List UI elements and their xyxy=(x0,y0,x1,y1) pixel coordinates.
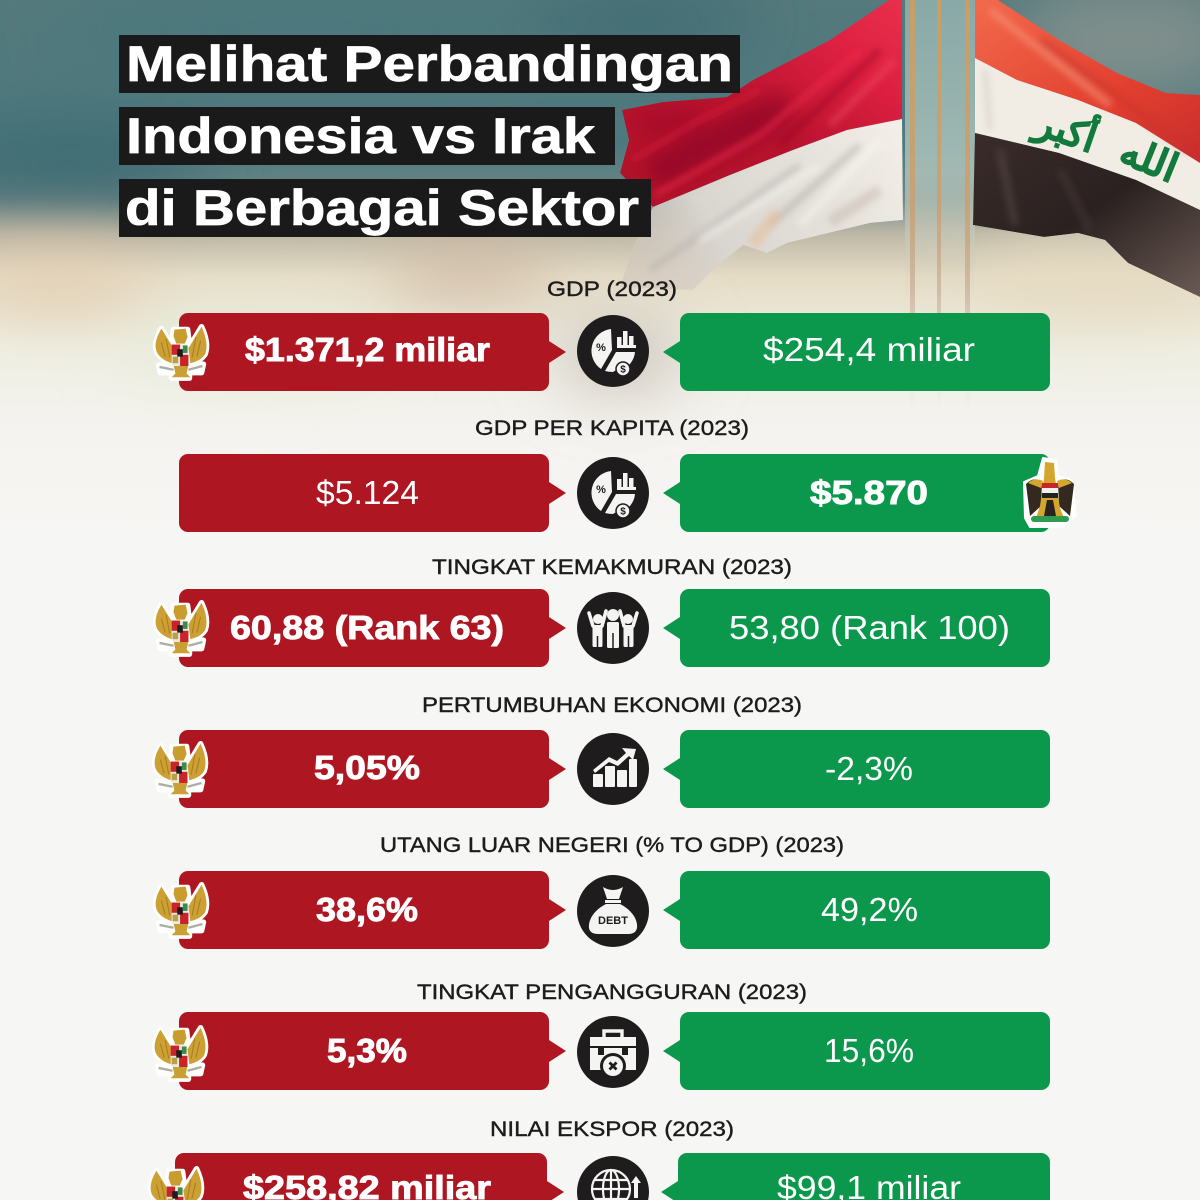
Indonesia value: 5,3% xyxy=(327,1032,407,1069)
flagpoles xyxy=(910,0,970,410)
flag: Indonesia xyxy=(620,0,903,290)
Indonesia value xyxy=(179,454,566,532)
Indonesia value: 5,05% xyxy=(314,749,420,786)
row: GDP per kapita xyxy=(179,417,1076,532)
flag: Iraq xyxy=(973,0,1200,297)
flag inscription xyxy=(1027,95,1184,191)
icon: economy pie xyxy=(577,457,649,529)
Iraq value: $5.870 xyxy=(810,474,928,511)
Iraq value xyxy=(663,454,1050,532)
Indonesia value xyxy=(179,1012,566,1090)
icon: Garuda emblem xyxy=(151,1169,202,1200)
icon: prosperity people xyxy=(577,592,649,664)
icon: briefcase with cross xyxy=(577,1016,649,1088)
Iraq value xyxy=(661,1153,1050,1200)
title xyxy=(119,35,740,237)
Iraq value xyxy=(663,730,1050,808)
Indonesia value xyxy=(179,730,566,808)
row: Tingkat pengangguran xyxy=(155,981,1050,1090)
Indonesia value xyxy=(179,589,566,667)
icon: Garuda emblem xyxy=(156,327,207,378)
Indonesia value: 38,6% xyxy=(316,891,418,928)
flag inscription: أكبر xyxy=(1027,95,1104,162)
title line 2: Indonesia vs Irak xyxy=(126,108,595,164)
Iraq value: -2,3% xyxy=(825,750,913,787)
label: NILAI EKSPOR (2023) xyxy=(490,1118,734,1141)
Iraq value: 15,6% xyxy=(824,1032,914,1069)
Iraq value xyxy=(663,1012,1050,1090)
icon: economy pie xyxy=(577,315,649,387)
row: Tingkat kemakmuran xyxy=(156,556,1050,667)
icon: growth chart xyxy=(577,733,649,805)
icon: Garuda emblem xyxy=(156,603,207,654)
Indonesia value xyxy=(179,871,566,949)
flag inscription: الله xyxy=(1114,129,1184,191)
label: PERTUMBUHAN EKONOMI (2023) xyxy=(422,694,802,717)
row: Pertumbuhan ekonomi xyxy=(155,694,1050,808)
row: GDP xyxy=(156,278,1050,391)
Iraq value: 53,80 (Rank 100) xyxy=(729,609,1010,646)
row: Nilai ekspor xyxy=(151,1118,1050,1200)
icon: Garuda emblem xyxy=(155,1028,206,1079)
icon: Iraq eagle emblem xyxy=(1024,458,1076,527)
label: GDP (2023) xyxy=(547,278,677,301)
Indonesia value: $1.371,2 miliar xyxy=(245,331,490,368)
icon: Garuda emblem xyxy=(156,885,207,936)
Indonesia value: $5.124 xyxy=(316,474,419,511)
icon: debt bag xyxy=(577,875,649,947)
icon: Garuda emblem xyxy=(155,744,206,795)
Iraq value: $254,4 miliar xyxy=(763,331,975,368)
row: Utang luar negeri xyxy=(156,834,1050,949)
title line 3: di Berbagai Sektor xyxy=(125,180,639,236)
label: TINGKAT PENGANGGURAN (2023) xyxy=(417,981,807,1004)
label: UTANG LUAR NEGERI (% TO GDP) (2023) xyxy=(380,834,844,857)
label: TINGKAT KEMAKMURAN (2023) xyxy=(432,556,792,579)
Indonesia value: 60,88 (Rank 63) xyxy=(230,609,504,646)
Iraq value: 49,2% xyxy=(821,891,918,928)
Indonesia value xyxy=(179,313,566,391)
label: GDP PER KAPITA (2023) xyxy=(475,417,749,440)
Indonesia value xyxy=(175,1153,564,1200)
Iraq value xyxy=(663,313,1050,391)
Iraq value xyxy=(663,871,1050,949)
title line 1: Melihat Perbandingan xyxy=(126,36,733,92)
icon: globe export xyxy=(577,1156,649,1200)
Iraq value xyxy=(663,589,1050,667)
